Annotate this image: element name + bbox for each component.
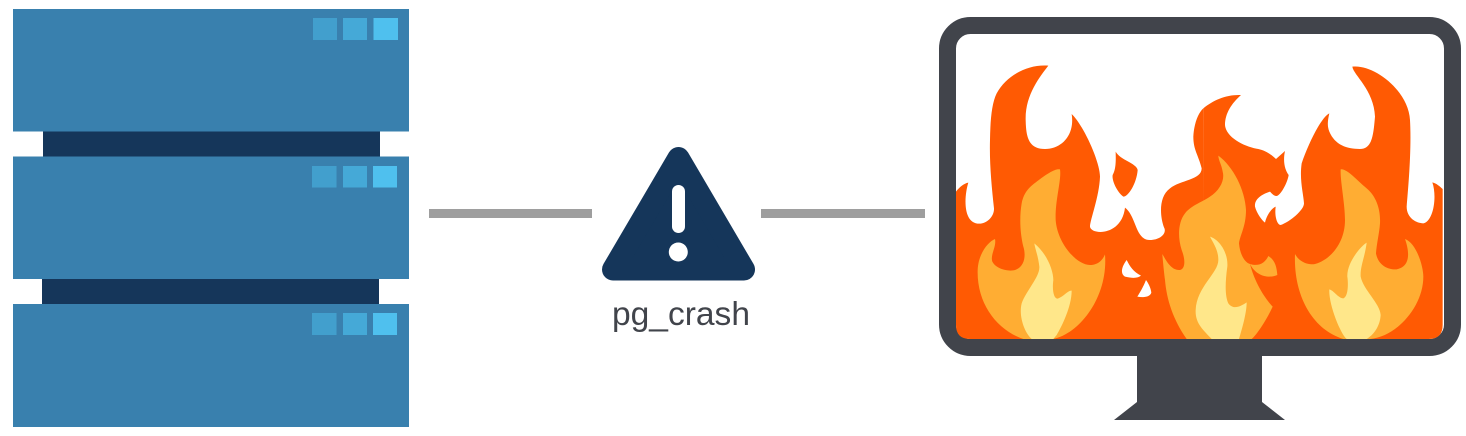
flames left half bbox=[956, 66, 1203, 339]
flame middle, outer bbox=[1162, 156, 1273, 339]
flame middle, side patch bbox=[1250, 256, 1277, 277]
server unit bottom bbox=[13, 304, 409, 427]
server unit top bbox=[13, 9, 409, 132]
icon: monitor on fire bbox=[948, 26, 1452, 420]
panel: server stack bbox=[13, 9, 409, 427]
flame left, outer bbox=[978, 169, 1105, 339]
label: pg_crash: pg_crash bbox=[612, 295, 750, 332]
hole in flames bbox=[1137, 280, 1151, 297]
connector band lower bbox=[42, 279, 379, 304]
connector band upper bbox=[43, 131, 380, 157]
connector line right bbox=[761, 209, 925, 218]
server unit middle bbox=[13, 156, 409, 279]
flame middle, inner bbox=[1196, 237, 1247, 339]
flame right, outer bbox=[1295, 169, 1423, 339]
flames right half bbox=[1162, 66, 1443, 339]
flying ember bbox=[1113, 152, 1138, 197]
hole in flames bbox=[1122, 260, 1141, 278]
connector line left bbox=[429, 209, 592, 218]
icon: warning triangle bbox=[613, 158, 744, 270]
flame left, inner bbox=[1021, 243, 1072, 339]
monitor screen and bezel bbox=[948, 26, 1452, 348]
monitor stand bbox=[1114, 350, 1285, 420]
flame right, inner bbox=[1329, 243, 1381, 339]
